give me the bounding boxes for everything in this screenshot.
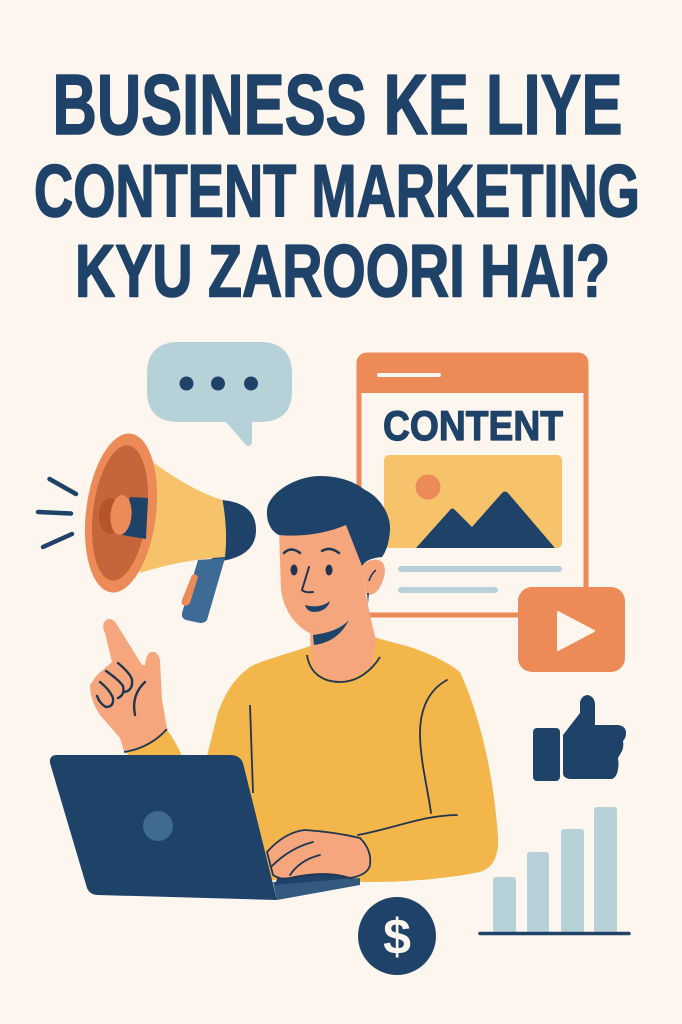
- icon: sound lines: [38, 479, 76, 547]
- sweater: [127, 600, 498, 882]
- hair: [267, 476, 390, 566]
- laptop: [50, 755, 360, 900]
- face: [279, 520, 375, 645]
- icon: megaphone: [77, 429, 256, 623]
- icon: dollar coin: $: [383, 909, 411, 965]
- ear: [362, 559, 385, 604]
- person: [127, 476, 498, 882]
- bar chart: [480, 807, 629, 934]
- icon: speech bubble: [147, 342, 292, 446]
- hand: on keyboard: [267, 830, 370, 885]
- icon: content browser window: CONTENT: [383, 402, 563, 449]
- icon: video play button: [518, 587, 625, 672]
- title: [34, 58, 640, 312]
- icon: thumbs up: [533, 695, 626, 781]
- icon: dollar coin: [358, 897, 436, 975]
- icon: content browser window: [357, 353, 588, 615]
- hand: pointing: [90, 619, 182, 756]
